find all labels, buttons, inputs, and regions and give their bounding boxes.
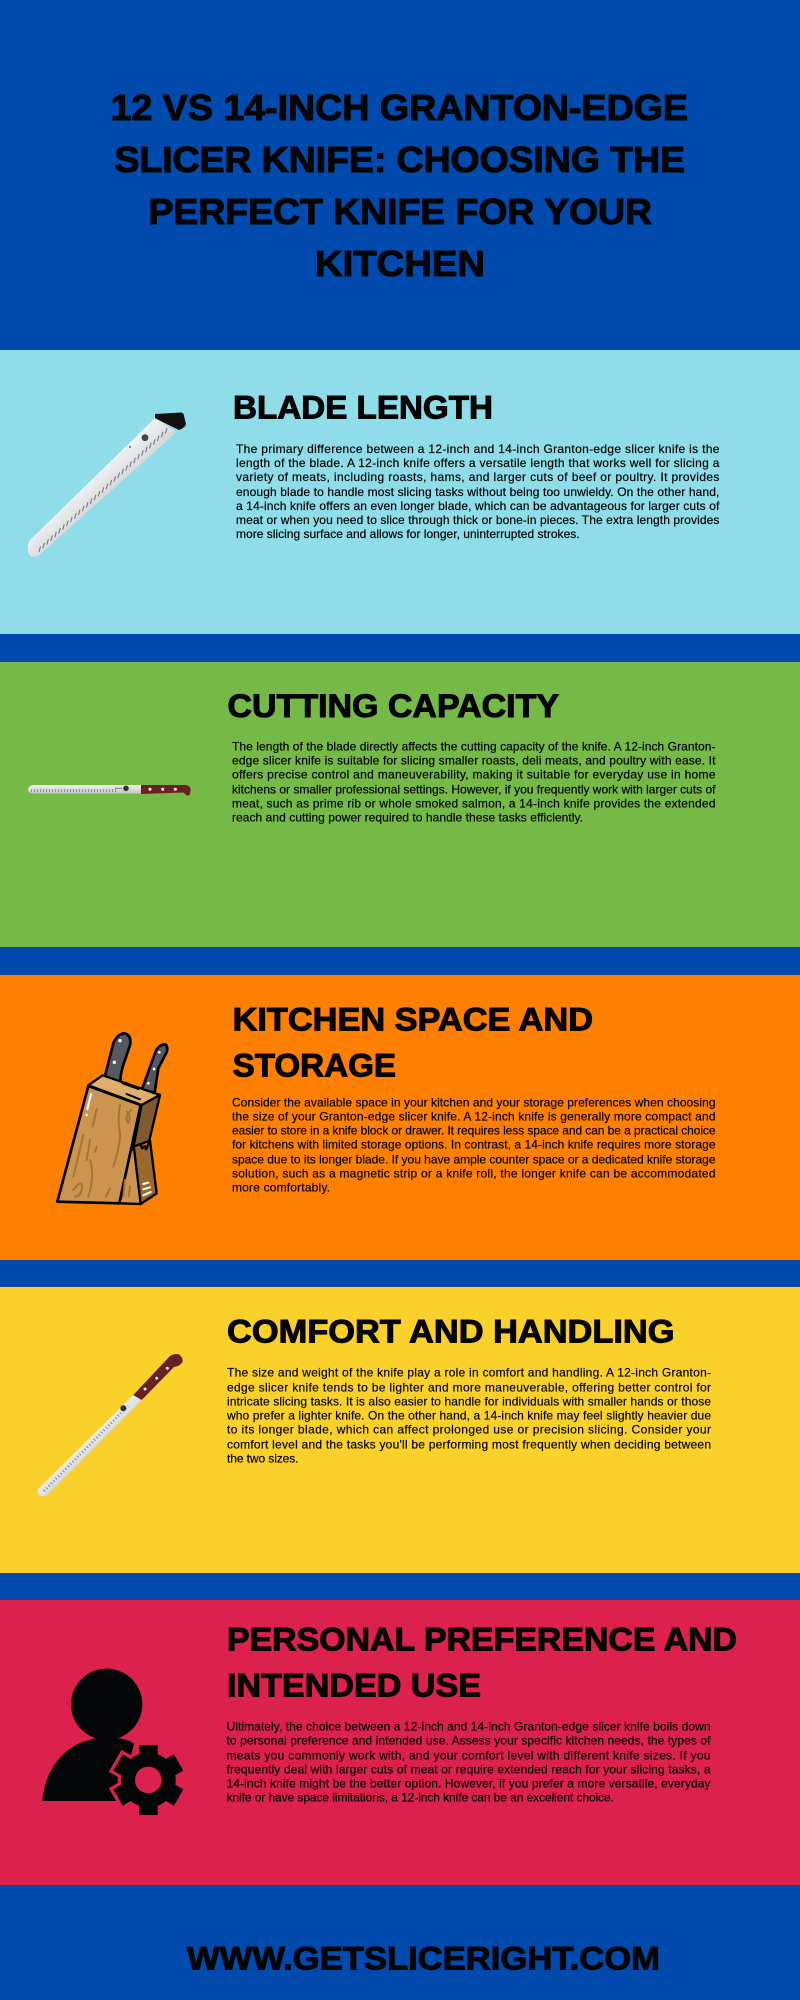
text: personal preference and intended use: 14-inch knife might be the better option. However, if you prefer a more versatile, everyday [226,1776,710,1790]
text: comfort and handling: who prefer a lighter knife. On the other hand, a 14-inch knife may feel slightly heavier due [226,1408,711,1422]
text: cutting capacity: kitchens or smaller professional settings. However, if you frequently work with larger cuts of [232,782,716,796]
text: blade length: length of the blade. A 12-inch knife offers a versatile length that works well for slicing a [236,456,720,470]
text: cutting capacity [232,739,716,824]
heading: kitchen space and storage [233,1002,593,1084]
panel: cutting capacity [0,662,800,947]
heading: kitchen space and storage: KITCHEN SPACE AND [233,1002,593,1038]
text: blade length: enough blade to handle most slicing tasks without being too unwieldy. On the other hand, [236,485,719,499]
heading: cutting capacity: CUTTING CAPACITY [228,688,559,724]
text: cutting capacity: offers precise control and maneuverability, making it suitable for everyday use in home [232,767,716,781]
text: blade length: The primary difference between a 12-inch and 14-inch Granton-edge slicer knife is the [236,442,720,456]
text: comfort and handling: the two sizes. [227,1451,298,1465]
text: kitchen space and storage: easier to store in a knife block or drawer. It requires less space and can be a practical choice [232,1123,716,1137]
panel: comfort and handling [0,1287,800,1573]
title: 12 VS 14-INCH GRANTON-EDGE [111,87,688,128]
text: blade length: variety of meats, including roasts, hams, and larger cuts of beef or poultry. It provides [236,470,719,484]
title: SLICER KNIFE: CHOOSING THE [114,139,685,180]
text: personal preference and intended use: Ultimately, the choice between a 12-inch and 14-inch Granton-edge slicer knife boils down [226,1719,710,1733]
text: cutting capacity: reach and cutting power required to handle these tasks efficiently. [232,810,583,824]
text: kitchen space and storage: more comfortably. [232,1180,330,1194]
heading: personal preference and intended use: INTENDED USE [227,1668,481,1704]
text: kitchen space and storage: solution, such as a magnetic strip or a knife roll, the longer knife can be accommodated [232,1166,716,1180]
icon: person with gear [42,1669,183,1815]
panel: blade length [0,350,800,634]
text: personal preference and intended use: frequently deal with larger cuts of meat or require extended reach for your slicing tasks, a [226,1762,711,1776]
text: kitchen space and storage: space due to its longer blade. If you have ample counter space or a dedicated knife storage [232,1152,716,1166]
text: blade length: a 14-inch knife offers an even longer blade, which can be advantageous for larger cuts of [236,499,720,513]
panel: personal preference and intended use [0,1600,800,1885]
heading: blade length: BLADE LENGTH [233,390,493,426]
text: kitchen space and storage: for kitchens with limited storage options. In contrast, a 14-inch knife requires more storage [232,1137,716,1151]
text: cutting capacity: The length of the blade directly affects the cutting capacity of the knife. A 12-inch Granton- [232,739,716,753]
text: cutting capacity: edge slicer knife is suitable for slicing smaller roasts, deli meats, and poultry with ease. It [232,753,716,767]
heading: personal preference and intended use [227,1622,737,1704]
text: blade length: more slicing surface and allows for longer, uninterrupted strokes. [236,527,580,541]
text: comfort and handling: intricate slicing tasks. It is also easier to handle for individuals with smaller hands or those [227,1394,711,1408]
text: comfort and handling [226,1365,711,1465]
heading: personal preference and intended use: PERSONAL PREFERENCE AND [227,1622,737,1658]
text: kitchen space and storage: Consider the available space in your kitchen and your storage preferences when choosing [232,1095,716,1109]
text: personal preference and intended use [226,1719,711,1804]
text: kitchen space and storage: the size of your Granton-edge slicer knife. A 12-inch knife is generally more compact and [232,1109,716,1123]
text: comfort and handling: The size and weight of the knife play a role in comfort and handling. A 12-inch Granton- [227,1365,711,1379]
text: comfort and handling: comfort level and the tasks you'll be performing most frequently when deciding between [227,1437,711,1451]
title: PERFECT KNIFE FOR YOUR [148,191,652,232]
icon: wood-handled slicer knife, diagonal [37,1354,183,1496]
title: KITCHEN [315,243,485,284]
text: kitchen space and storage [232,1095,716,1194]
text: personal preference and intended use: knife or have space limitations, a 12-inch knife can be an excellent choice. [226,1790,614,1804]
text: personal preference and intended use: to personal preference and intended use. Assess your specific kitchen needs, the types of [226,1733,711,1747]
panel: kitchen space and storage [0,975,800,1260]
text: blade length: meat or when you need to slice through thick or bone-in pieces. The extra length provides [236,513,719,527]
text: blade length [236,442,720,541]
text: cutting capacity: meat, such as prime rib or whole smoked salmon, a 14-inch knife provides the extended [232,796,716,810]
icon: wood-handled slicer knife, horizontal [28,785,191,796]
text: personal preference and intended use: meats you commonly work with, and your comfort level with different knife sizes. If you [226,1748,710,1762]
icon: black-handled granton slicer knife [28,412,186,557]
text: comfort and handling: edge slicer knife tends to be lighter and more maneuverable, offering better control for [227,1380,711,1394]
heading: kitchen space and storage: STORAGE [233,1048,396,1084]
heading: comfort and handling: COMFORT AND HANDLING [227,1314,674,1350]
icon: wooden knife block [57,1033,167,1204]
text: comfort and handling: to its longer blade, which can affect prolonged use or precision slicing. Consider your [227,1422,711,1436]
title [111,87,688,284]
footer website: WWW.GETSLICERIGHT.COM [187,1940,660,1976]
